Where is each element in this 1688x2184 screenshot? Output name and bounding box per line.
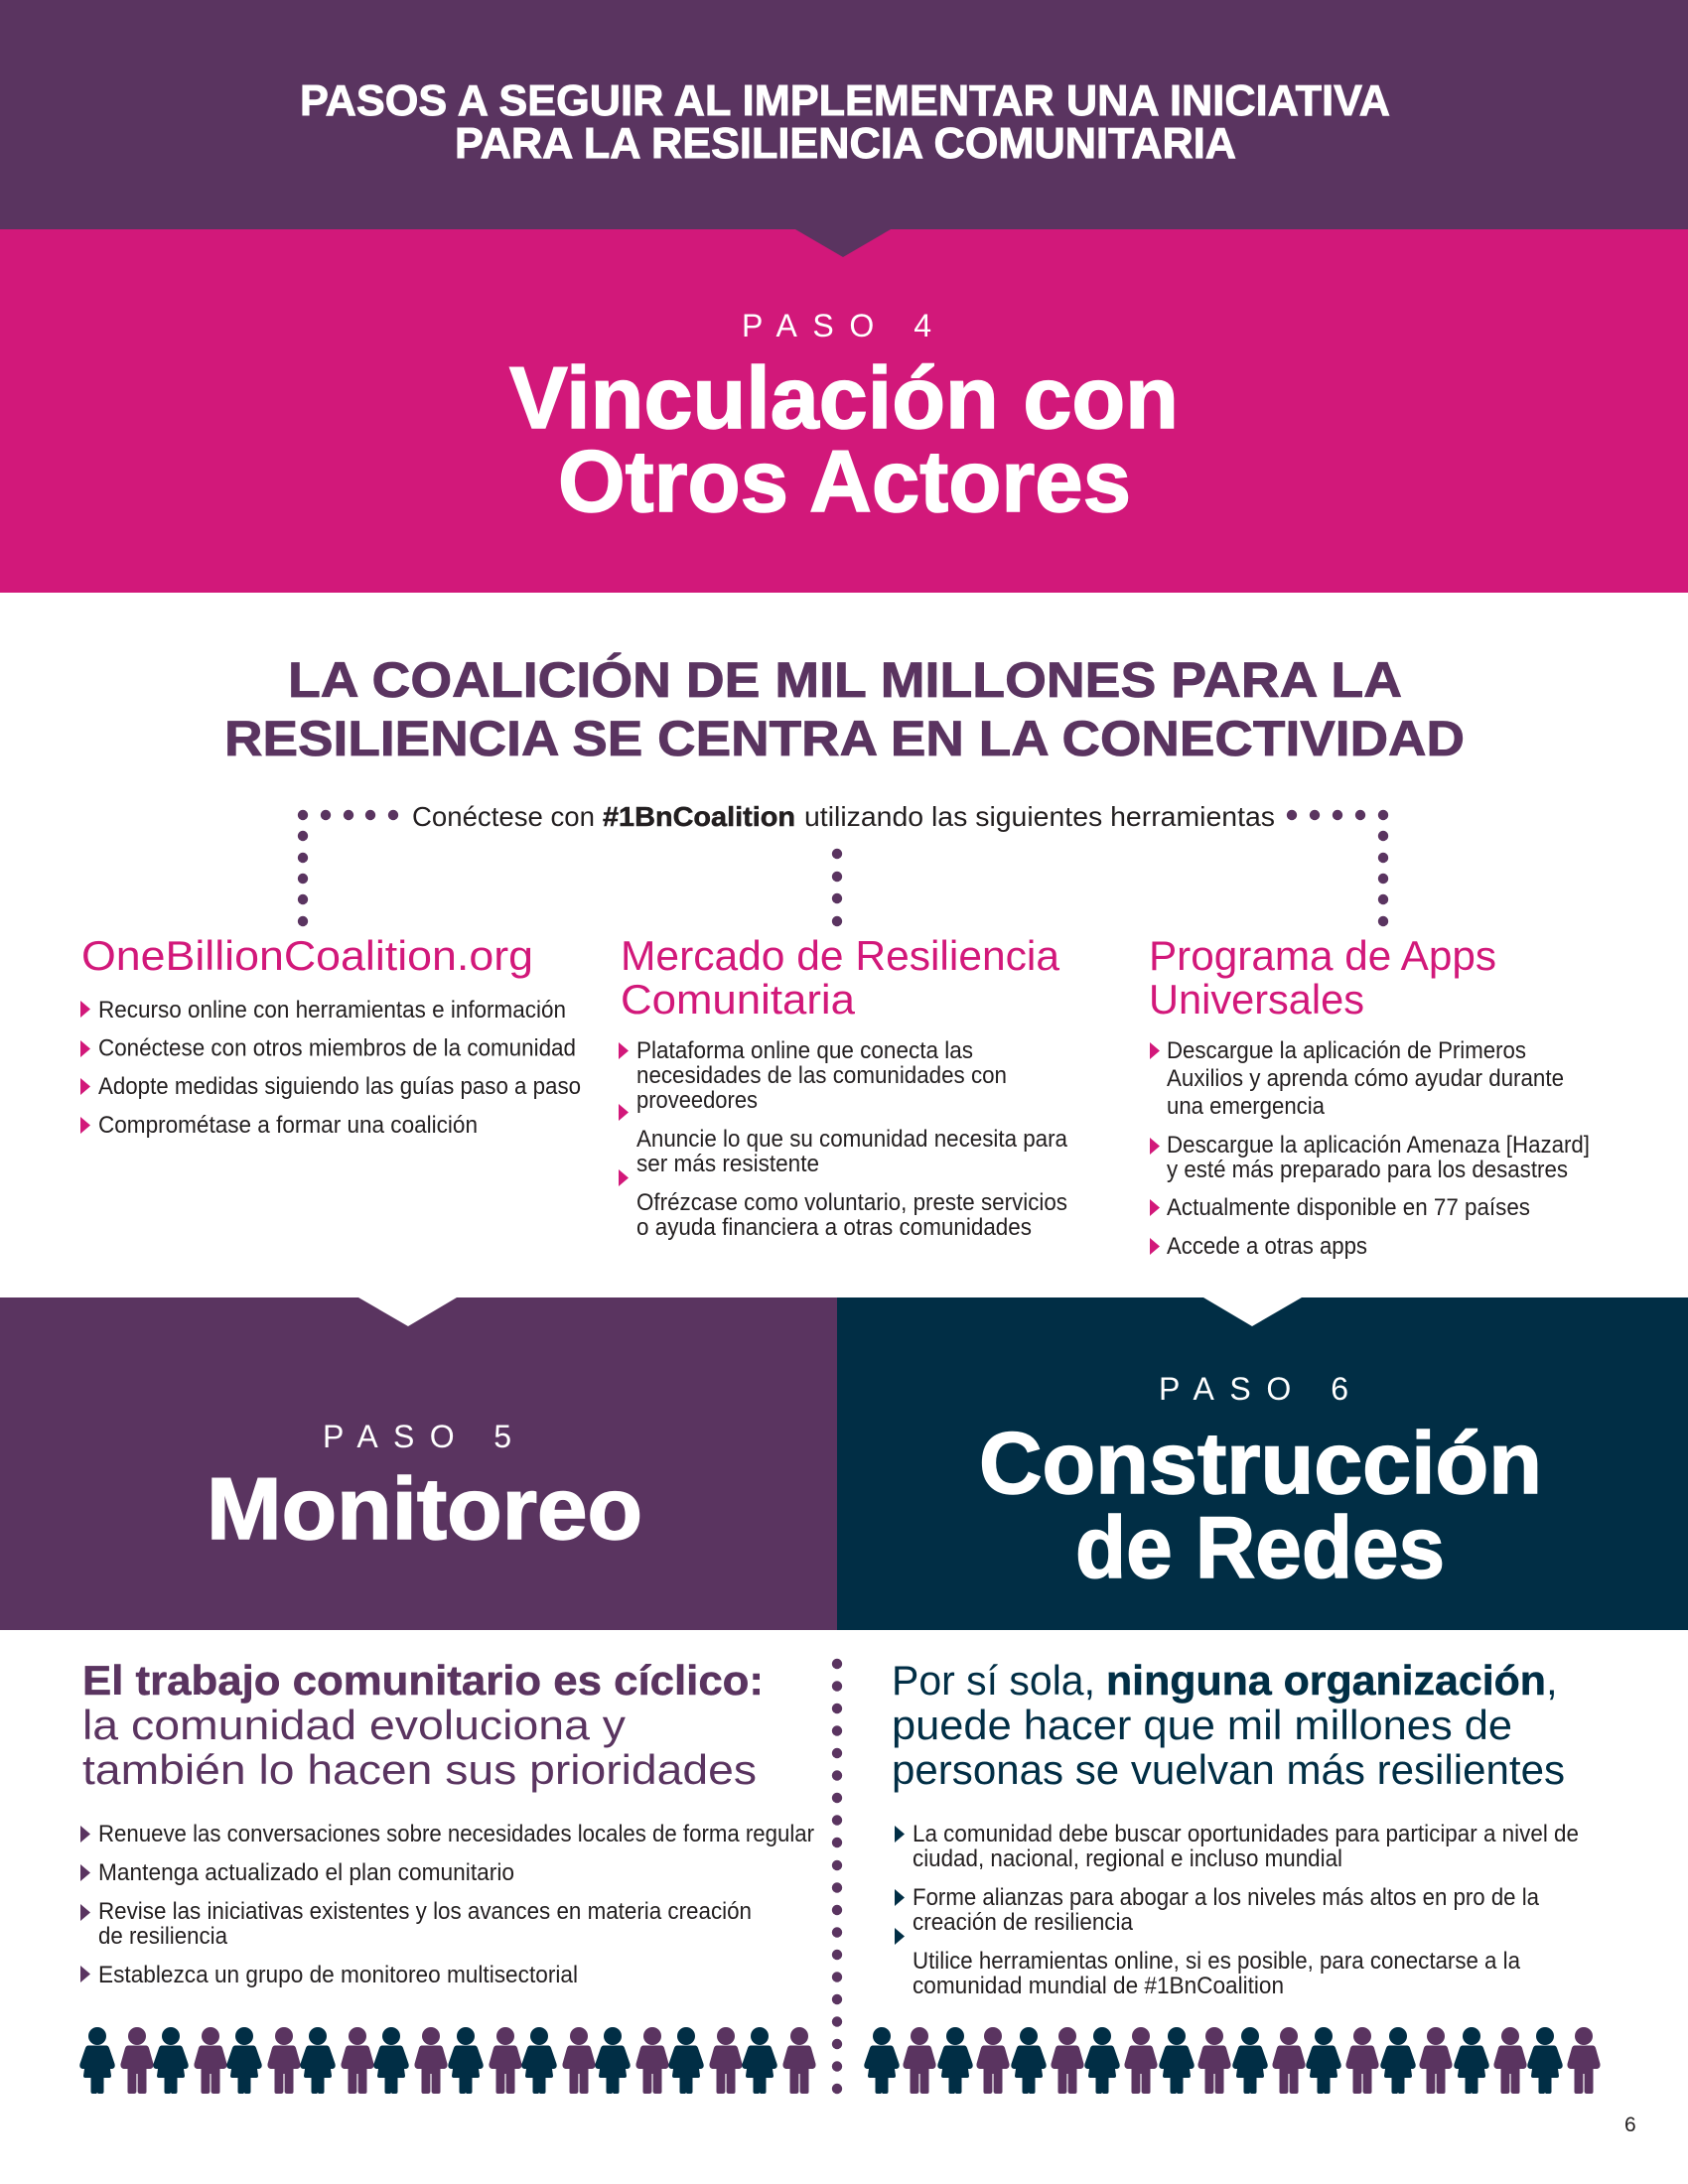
bullet list: proveedores — [636, 1087, 758, 1114]
redes bullet list: Utilice herramientas online, si es posible, para conectarse a la — [913, 1948, 1521, 1975]
arrow: paso 5 notch — [358, 1297, 457, 1326]
bullet list: Actualmente disponible en 77 países — [1167, 1194, 1530, 1221]
bullet list: una emergencia — [1167, 1093, 1326, 1120]
redes bullet list: Forme alianzas para abogar a los niveles más altos en pro de la — [913, 1884, 1540, 1911]
redes heading: puede hacer que mil millones de — [892, 1702, 1512, 1748]
monitoreo heading: la comunidad evoluciona y — [82, 1702, 626, 1748]
column: OneBillionCoalition.org — [80, 932, 581, 1139]
paso 6 heading: de Redes — [1075, 1498, 1445, 1596]
paso 4 heading — [509, 348, 1179, 530]
dotted connectors — [298, 810, 1388, 926]
connection text: utilizando las siguientes herramientas — [804, 801, 1275, 832]
monitoreo bullet list — [80, 1821, 814, 1988]
redes heading: ninguna organización — [1106, 1657, 1546, 1704]
monitoreo bullet list: de resiliencia — [98, 1923, 228, 1950]
column heading: Comunitaria — [621, 976, 856, 1023]
monitoreo bullet list: Establezca un grupo de monitoreo multisectorial — [98, 1962, 578, 1988]
column heading — [621, 932, 1060, 1023]
connection text: Conéctese con — [412, 801, 595, 832]
monitoreo bullet list: Revise las iniciativas existentes y los avances en materia creación — [98, 1898, 752, 1925]
paso 5 label: PASO 5 — [323, 1419, 511, 1454]
bullet list: Descargue la aplicación de Primeros — [1167, 1037, 1526, 1064]
bullet list: Ofrézcase como voluntario, preste servicios — [636, 1189, 1067, 1216]
paso 6 label: PASO 6 — [1159, 1371, 1348, 1407]
bullet list: Descargue la aplicación Amenaza [Hazard] — [1167, 1132, 1590, 1159]
monitoreo bullet list: Mantenga actualizado el plan comunitario — [98, 1859, 514, 1886]
column heading: OneBillionCoalition.org — [81, 932, 533, 979]
column heading: Mercado de Resiliencia — [621, 932, 1060, 979]
bullet list: Conéctese con otros miembros de la comunidad — [98, 1034, 576, 1062]
column heading — [1149, 932, 1496, 1023]
panel: monitoreo text — [80, 1657, 814, 1988]
column: Mercado de Resiliencia Comunitaria — [619, 932, 1068, 1241]
bullet list: Anuncie lo que su comunidad necesita para — [636, 1126, 1068, 1153]
paso 5 heading: Monitoreo — [207, 1459, 642, 1558]
title: PASOS A SEGUIR AL IMPLEMENTAR UNA INICIATIVA — [300, 76, 1390, 125]
paso 4 heading: Otros Actores — [558, 432, 1131, 530]
redes heading — [892, 1657, 1565, 1793]
panel: paso 4 banner — [0, 229, 1688, 593]
column heading: Universales — [1149, 976, 1364, 1023]
monitoreo heading — [82, 1657, 764, 1793]
redes heading: Por sí sola, — [892, 1657, 1095, 1704]
arrow: paso 6 notch — [1203, 1297, 1302, 1326]
dotted divider — [832, 1659, 842, 2094]
heading: coalición: LA COALICIÓN DE MIL MILLONES PARA LA — [288, 652, 1402, 708]
redes heading: personas se vuelvan más resilientes — [892, 1746, 1565, 1793]
bullet list — [80, 997, 581, 1139]
bullet list — [1150, 1037, 1590, 1260]
redes bullet list: comunidad mundial de #1BnCoalition — [913, 1973, 1284, 1999]
connection text: #1BnCoalition — [603, 801, 795, 832]
monitoreo heading: El trabajo comunitario es cíclico: — [82, 1657, 764, 1704]
heading: coalición — [224, 652, 1465, 766]
connection text — [412, 801, 1275, 832]
title — [300, 76, 1390, 168]
column heading: Programa de Apps — [1149, 932, 1496, 979]
redes heading: , — [1546, 1657, 1558, 1704]
header panel — [0, 0, 1688, 230]
icon row: people left — [79, 2027, 816, 2094]
paso 6 heading: Construcción — [979, 1414, 1542, 1512]
bullet list: y esté más preparado para los desastres — [1167, 1157, 1568, 1183]
paso 4 label: PASO 4 — [742, 308, 931, 343]
redes bullet list: La comunidad debe buscar oportunidades para participar a nivel de — [913, 1821, 1579, 1847]
monitoreo bullet list: Renueve las conversaciones sobre necesidades locales de forma regular — [98, 1821, 814, 1847]
bullet list: Auxilios y aprenda cómo ayudar durante — [1167, 1065, 1564, 1092]
bullet list: necesidades de las comunidades con — [636, 1062, 1007, 1089]
icon row: people right — [864, 2027, 1601, 2094]
bullet list: o ayuda financiera a otras comunidades — [636, 1214, 1032, 1241]
redes bullet list: creación de resiliencia — [913, 1909, 1134, 1936]
redes bullet list — [895, 1821, 1579, 1999]
monitoreo heading: también lo hacen sus prioridades — [82, 1746, 757, 1793]
bullet list: Adopte medidas siguiendo las guías paso a paso — [98, 1073, 581, 1100]
bullet list: ser más resistente — [636, 1151, 819, 1177]
heading: coalición: RESILIENCIA SE CENTRA EN LA CONECTIVIDAD — [224, 711, 1465, 766]
bullet list: Recurso online con herramientas e información — [98, 997, 566, 1024]
column: Programa de Apps Universales — [1149, 932, 1590, 1260]
arrow: header notch — [795, 229, 891, 257]
bullet list: Plataforma online que conecta las — [636, 1037, 973, 1064]
bullet list: Comprométase a formar una coalición — [98, 1112, 478, 1139]
bullet list — [619, 1037, 1068, 1241]
paso 4 heading: Vinculación con — [509, 348, 1179, 447]
panel: paso 5 banner — [0, 1297, 837, 1630]
panel: paso 6 banner — [837, 1297, 1688, 1630]
paso 6 heading — [979, 1414, 1542, 1596]
bullet list: Accede a otras apps — [1167, 1233, 1367, 1260]
page number: 6 — [1624, 2114, 1636, 2136]
title: PARA LA RESILIENCIA COMUNITARIA — [455, 119, 1236, 168]
redes bullet list: ciudad, nacional, regional e incluso mundial — [913, 1845, 1342, 1872]
panel: redes text — [892, 1657, 1579, 1999]
